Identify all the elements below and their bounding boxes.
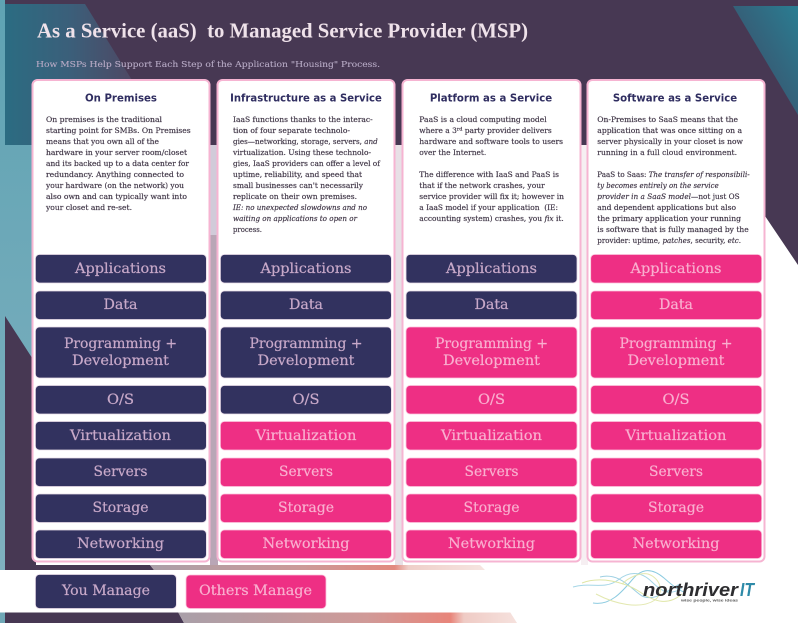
text: On Premises description: hardware in your server room/closet [46, 148, 187, 157]
text: IaaS description: small businesses can't necessarily [233, 181, 364, 190]
stack: On Premises layers: Storage [92, 500, 148, 516]
legend item: You Manage: You Manage [61, 583, 150, 599]
text: PaaS description [419, 115, 564, 223]
text: PaaS description: accounting system) crashes, you fix it. [419, 214, 564, 223]
stack: PaaS layers: Applications [445, 261, 537, 277]
wordmark: IT: IT [740, 580, 756, 600]
text: SaaS description: and dependent applications but also [597, 203, 736, 212]
text: IaaS description [232, 115, 381, 234]
text: SaaS description: application that was once sitting on a [597, 126, 742, 135]
stack: SaaS layers: Programming + [620, 336, 732, 352]
stack: PaaS layers: Data [474, 297, 508, 313]
logo: northriver IT [573, 571, 756, 605]
stack: IaaS layers: Applications [259, 261, 352, 277]
title: As a Service (aaS) to Managed Service Provider (MSP) [37, 18, 528, 42]
text: SaaS description: server physically in your closet is now [597, 137, 743, 146]
stack: IaaS layers: Programming + [250, 336, 362, 352]
stack: SaaS layers: Servers [649, 464, 703, 480]
text: IaaS description: waiting on applications to open or [233, 214, 357, 223]
legend [0, 570, 798, 612]
stack: On Premises layers: Servers [94, 464, 148, 480]
legend item: You Manage [35, 574, 176, 608]
stack: SaaS layers: Development [628, 353, 725, 369]
text: SaaS description: provider: uptime, patches, security, etc. [597, 236, 741, 245]
stack: PaaS layers: Programming + [435, 336, 548, 352]
text: IaaS description: gies, IaaS providers can offer a level of [233, 159, 381, 168]
stack: PaaS layers: Networking [448, 536, 535, 552]
icon: logo waves [573, 571, 684, 605]
text: PaaS description: party provider delivers [462, 126, 552, 135]
text: SaaS description: provider in a SaaS model—not just OS [597, 192, 740, 201]
stack: SaaS layers: Applications [629, 261, 722, 277]
text: IaaS description: process. [233, 225, 262, 234]
text: On Premises description: your hardware (on the network) you [45, 181, 184, 190]
stack: IaaS layers: O/S [292, 392, 320, 408]
text: On Premises description: redundancy. Anything connected to [46, 170, 184, 179]
text: PaaS description: a IaaS model if your application (IE: [419, 203, 558, 212]
stack: SaaS layers: O/S [662, 392, 690, 408]
text: PaaS description: PaaS is a cloud computing model [419, 115, 547, 124]
text: On Premises description: your closet and re-set. [45, 203, 132, 212]
text: IaaS description: virtualization. Using these technolo- [232, 148, 371, 157]
heading: Infrastructure as a Service: Infrastructure as a Service [230, 92, 382, 104]
text: SaaS description: On-Premises to SaaS means that the [597, 115, 739, 124]
stack: SaaS layers: Networking [632, 536, 720, 552]
text: PaaS description: The difference with IaaS and PaaS is [419, 170, 559, 179]
stack: IaaS layers: Data [289, 297, 323, 313]
text: PaaS description: hardware and software tools to users [419, 137, 563, 146]
text: SaaS description: PaaS to Saas: The transfer of responsibili- [597, 170, 750, 179]
stack: On Premises layers: Development [72, 353, 169, 369]
text: On Premises description: also own and can typically want into [46, 192, 187, 201]
panel: Software as a Service [588, 80, 764, 562]
wordmark: northriver [643, 580, 739, 600]
stack: SaaS layers: Storage [648, 500, 704, 516]
stack: PaaS layers: Servers [464, 464, 518, 480]
stack: PaaS layers [406, 254, 577, 558]
text: PaaS description: that if the network crashes, your [419, 181, 545, 190]
stack: On Premises layers: Networking [77, 536, 164, 552]
heading: On Premises: On Premises [85, 92, 157, 104]
stack: On Premises layers: Applications [74, 261, 166, 277]
text: IaaS description: tion of four separate technolo- [233, 126, 350, 135]
text: IaaS description: gies—networking, storage, servers, and [233, 137, 378, 146]
stack: SaaS layers: Data [659, 297, 693, 313]
stack: IaaS layers: Storage [278, 500, 334, 516]
text: On Premises description: starting point for SMBs. On Premises [46, 126, 191, 135]
subtitle: How MSPs Help Support Each Step of the Application "Housing" Process. [36, 60, 380, 69]
text: SaaS description: ty becomes entirely on the service [597, 181, 719, 190]
stack: IaaS layers: Development [258, 353, 355, 369]
text: On Premises description: On premises is the traditional [46, 115, 163, 124]
panel: On Premises [32, 80, 210, 562]
stack: On Premises layers: Programming + [64, 336, 177, 352]
stack: SaaS layers [591, 254, 762, 558]
stack: On Premises layers: Virtualization [69, 428, 171, 444]
stack: IaaS layers: Virtualization [254, 428, 356, 444]
tagline: wise people, wise ideas [680, 598, 739, 602]
stack: On Premises layers [35, 254, 206, 558]
text: IaaS description: replicate on their own premises. [233, 192, 357, 201]
text: SaaS description [597, 115, 750, 245]
text: IaaS description: uptime, reliability, and speed that [233, 170, 362, 179]
panel: Infrastructure as a Service [218, 80, 394, 562]
stack: SaaS layers: Virtualization [624, 428, 726, 444]
text: SaaS description: the primary application your running [597, 214, 741, 223]
text: On Premises description: means that you own all of the [46, 137, 159, 146]
stack: PaaS layers: Virtualization [440, 428, 542, 444]
panel: Platform as a Service [402, 80, 580, 562]
stack: On Premises layers: O/S [107, 392, 134, 408]
stack: PaaS layers: Storage [464, 500, 520, 516]
text: IaaS description: IaaS functions thanks to the interac- [233, 115, 373, 124]
text: IaaS description: IE: no unexpected slowdowns and no [232, 203, 367, 212]
text: PaaS description: over the Internet. [419, 148, 486, 157]
legend item: Others Manage [186, 575, 326, 608]
stack: IaaS layers: Servers [279, 464, 333, 480]
text: PaaS description: where a 3 [419, 126, 458, 135]
heading: Platform as a Service: Platform as a Service [430, 92, 552, 104]
text: PaaS description: service provider will fix it; however in [419, 192, 564, 201]
text: SaaS description: running in a full cloud environment. [597, 148, 737, 157]
legend item: Others Manage: Others Manage [199, 583, 312, 599]
text: On Premises description [45, 115, 191, 212]
stack: PaaS layers: O/S [478, 392, 505, 408]
text: SaaS description: is software that is fully managed by the [597, 225, 749, 234]
text: On Premises description: and its backed up to a data center for [46, 159, 189, 168]
stack: On Premises layers: Data [104, 297, 138, 313]
stack: IaaS layers [220, 254, 391, 558]
stack: PaaS layers: Development [443, 353, 540, 369]
text: PaaS description: rd [457, 126, 463, 132]
heading: Software as a Service: Software as a Service [613, 92, 737, 104]
stack: IaaS layers: Networking [262, 536, 350, 552]
